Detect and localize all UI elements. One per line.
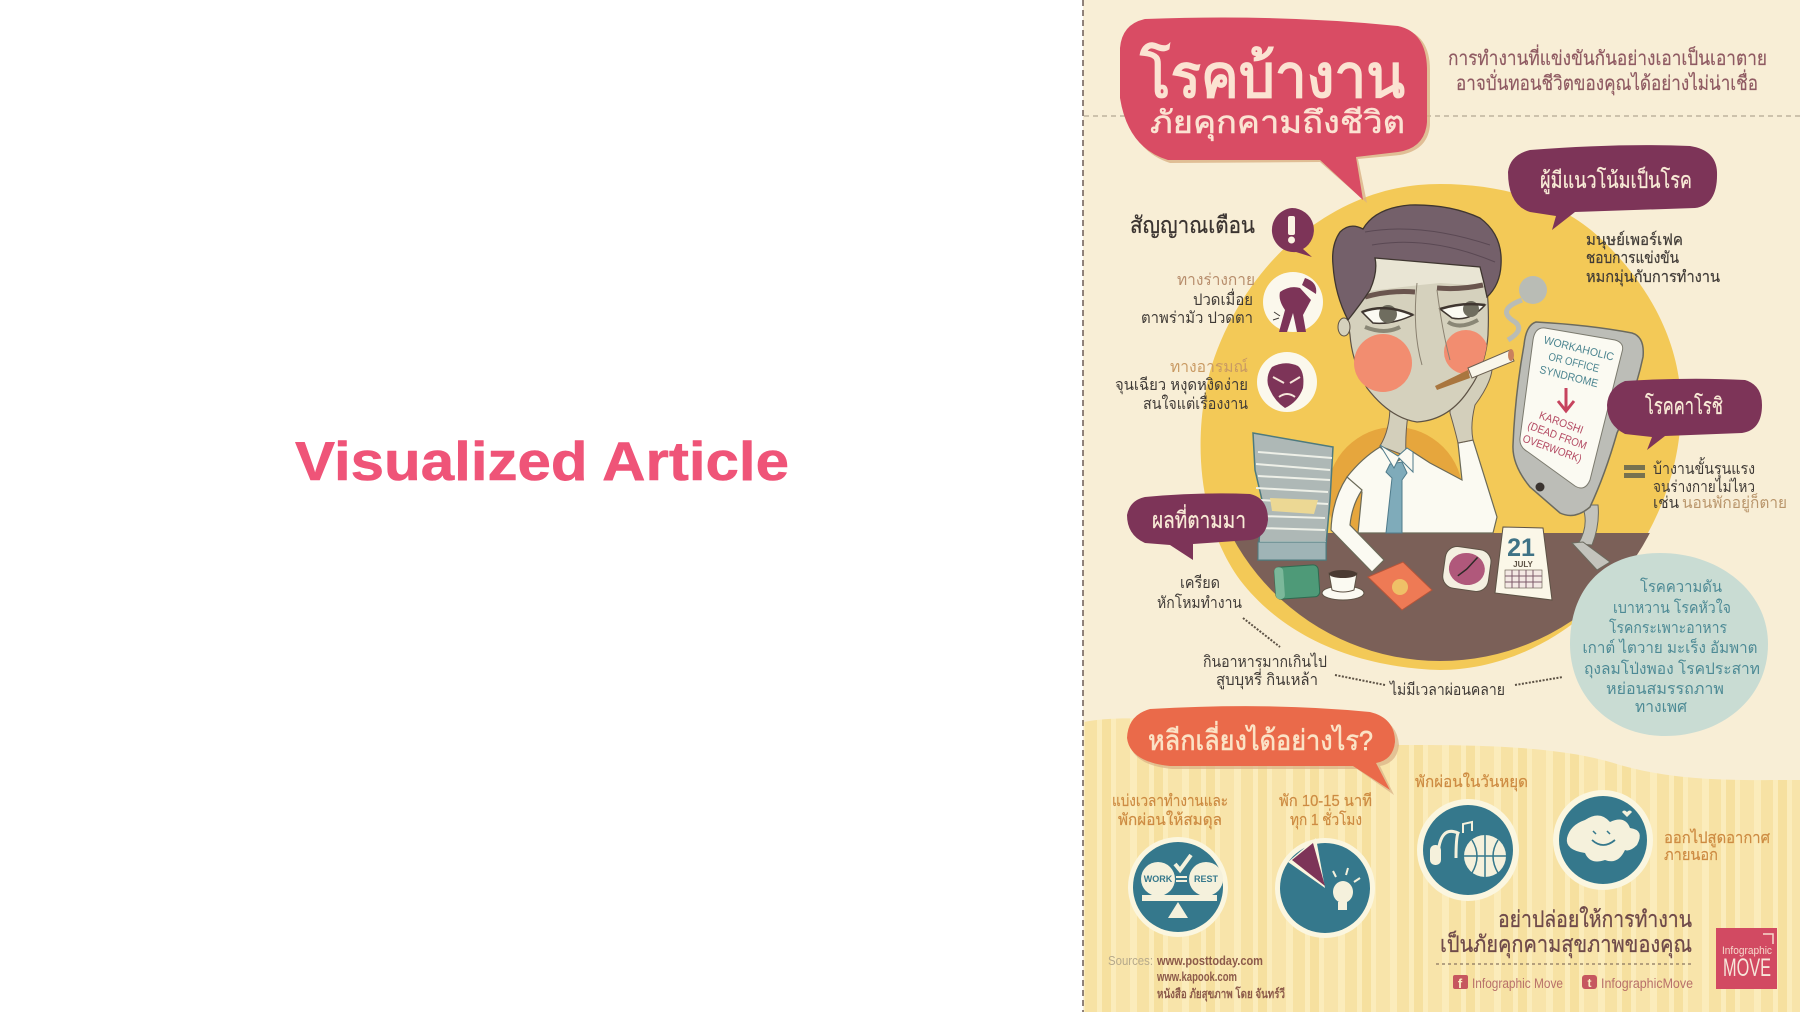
left eye: [1362, 305, 1413, 323]
yellow background shape: [1201, 184, 1681, 670]
icon: work rest balance: WORK: [1144, 874, 1173, 884]
poster left dashed edge: [1082, 0, 1084, 1012]
text: physical signs: ตาพร่ามัว ปวดตา: [1141, 310, 1253, 327]
screen text: workaholic: SYNDROME: [1538, 364, 1599, 390]
text: consequences: เครียด: [1180, 574, 1220, 592]
text: physical signs: [1141, 272, 1255, 327]
logo: Infographic Move: [1716, 928, 1777, 989]
panel: related diseases blob: ทางเพศ: [1635, 699, 1687, 716]
eyebrows: [1365, 285, 1483, 297]
social links: f: [1458, 976, 1463, 991]
closing message: อย่าปล่อยให้การทำงาน: [1498, 906, 1692, 932]
hair: [1333, 205, 1501, 320]
bubble: karoshi: [1607, 379, 1762, 450]
text: at-risk description: ชอบการแข่งขัน: [1586, 250, 1679, 267]
social links: InfographicMove: [1601, 976, 1693, 991]
sources: www.posttoday.com: [1156, 954, 1263, 968]
left arm sleeve: [1331, 477, 1384, 572]
right cheek: [1444, 330, 1488, 374]
calendar: 21: [1507, 534, 1535, 562]
tablet foot: [1572, 542, 1610, 570]
panel: related diseases blob: โรคความดัน: [1640, 577, 1722, 596]
bubble: how to avoid: [1127, 706, 1399, 795]
bubble: karoshi: โรคคาโรชิ: [1645, 393, 1723, 419]
table: [1234, 533, 1650, 661]
text: tips: พักผ่อนในวันหยุด: [1415, 772, 1528, 792]
icon: body pain: [1263, 272, 1323, 332]
smoke: [1506, 276, 1547, 340]
heading: warning signs: สัญญาณเตือน: [1130, 212, 1255, 238]
tablet screen: [1520, 328, 1623, 488]
icon: break clock: [1275, 838, 1375, 938]
footer dotted line: [1436, 963, 1693, 965]
panel: related diseases blob: [1570, 553, 1768, 736]
text: at-risk description: หมกมุ่นกับการทำงาน: [1586, 269, 1720, 287]
text: tips: พักผ่อนให้สมดุล: [1118, 810, 1222, 830]
sources: www.kapook.com: [1156, 970, 1237, 984]
text: emotional signs: สนใจแต่เรื่องงาน: [1143, 392, 1248, 413]
bubble: at-risk group: [1508, 145, 1717, 230]
bubble: consequences: ผลที่ตามมา: [1152, 504, 1246, 533]
text: consequences: สูบบุหรี่ กินเหล้า: [1216, 668, 1318, 690]
screen text: workaholic: [1538, 335, 1615, 390]
hair strands: [1365, 229, 1495, 262]
text: emotional signs: จุนเฉียว หงุดหงิดง่าย: [1115, 376, 1248, 395]
text: physical signs: ทางร่างกาย: [1177, 272, 1255, 289]
eye bags: [1365, 320, 1478, 331]
intro text: [1448, 44, 1767, 96]
panel: related diseases blob: ถุงลมโป่งพอง โรคประสาท: [1584, 659, 1760, 679]
heading: Visualized Article: Visualized Article: [295, 430, 789, 492]
panel: infographic poster: [1083, 0, 1800, 1012]
social links: t: [1588, 976, 1592, 990]
screen text: workaholic: WORKAHOLIC: [1542, 335, 1615, 364]
logo: Infographic Move: MOVE: [1723, 954, 1771, 982]
forehead: [1370, 258, 1484, 291]
panel: related diseases blob: เบาหวาน โรคหัวใจ: [1613, 598, 1731, 617]
logo: Infographic Move: Infographic: [1722, 945, 1772, 957]
text: consequences: [1157, 574, 1505, 699]
bubble: at-risk group: ผู้มีแนวโน้มเป็นโรค: [1540, 165, 1692, 194]
text: at-risk description: มนุษย์เพอร์เฟค: [1586, 230, 1683, 250]
text: karoshi description: [1653, 457, 1787, 513]
tablet body: [1513, 322, 1643, 515]
calendar: [1495, 527, 1552, 600]
paper stack: [1253, 433, 1333, 560]
coffee cup: [1322, 570, 1364, 600]
icon: equals sign: [1624, 465, 1645, 478]
text: tips: ภายนอก: [1664, 847, 1718, 864]
tablet stand: [1578, 505, 1598, 545]
text: tips: พัก 10-15 นาที: [1279, 792, 1372, 810]
tablet logo: [1536, 482, 1544, 492]
text: consequences: หักโหมทำงาน: [1157, 593, 1242, 612]
collar: [1380, 445, 1413, 472]
cigarette: [1435, 349, 1514, 390]
sources: หนังสือ ภัยสุขภาพ โดย จันทร์วี: [1157, 986, 1285, 1002]
icon: work rest balance: REST: [1194, 874, 1218, 884]
screen text: karoshi: OVERWORK): [1521, 433, 1583, 465]
screen text: workaholic: OR OFFICE: [1547, 351, 1600, 375]
bubble: consequences: [1127, 493, 1268, 560]
social links: [1453, 975, 1693, 991]
calendar: JULY: [1513, 560, 1534, 569]
text: consequences: ไม่มีเวลาผ่อนคลาย: [1388, 680, 1505, 699]
text: karoshi description: บ้างานขั้นรุนแรง: [1653, 457, 1755, 479]
face: [1347, 257, 1488, 422]
title text line 2: ภัยคุกคามถึงชีวิต: [1150, 105, 1405, 142]
text: tips: แบ่งเวลาทำงานและ: [1112, 793, 1228, 810]
bubble: how to avoid: หลีกเลี่ยงได้อย่างไร?: [1148, 721, 1373, 756]
screen text: karoshi: KAROSHI: [1537, 410, 1585, 437]
illustration: tablet with message: [1513, 322, 1643, 570]
left cheek: [1354, 334, 1412, 392]
text: consequences: กินอาหารมากเกินไป: [1203, 652, 1327, 671]
screen arrow: [1558, 388, 1574, 411]
text: physical signs: ปวดเมื่อย: [1193, 288, 1253, 309]
orange circle behind man: [1327, 427, 1463, 563]
alarm clock: [1441, 545, 1493, 593]
panel: related diseases blob: เกาต์ ไตวาย มะเร็ง อัมพาต: [1582, 637, 1758, 657]
hand: [1450, 370, 1492, 443]
illustration: desk items: [1253, 433, 1552, 610]
text: karoshi description: นอนพักอยู่ก็ตาย: [1682, 492, 1787, 513]
icon: work rest balance: [1128, 837, 1228, 937]
closing message: เป็นภัยคุกคามสุขภาพของคุณ: [1440, 929, 1692, 958]
screen text: karoshi: [1521, 410, 1588, 465]
striped footer band: [1084, 718, 1800, 1012]
closing message: [1440, 906, 1692, 958]
title bubble: [1120, 18, 1430, 203]
panel: related diseases blob: หย่อนสมรรถภาพ: [1606, 681, 1724, 698]
illustration: office worker: [1331, 205, 1547, 572]
panel: related diseases blob: โรคกระเพาะอาหาร: [1609, 618, 1727, 637]
icon: music and basketball: [1417, 799, 1519, 901]
neck: [1380, 405, 1408, 456]
tie: [1386, 462, 1407, 533]
poster background: [1083, 0, 1800, 1012]
sources: Sources:: [1108, 954, 1153, 968]
text: tips: ออกไปสูดอากาศ: [1664, 828, 1770, 848]
text: karoshi description: เช่น: [1653, 495, 1679, 512]
shirt torso and sleeve: [1347, 440, 1497, 533]
icon: angry face: [1257, 352, 1317, 412]
text: emotional signs: ทางอารมณ์: [1170, 357, 1248, 376]
sources: [1108, 954, 1285, 1002]
text: karoshi description: จนร่างกายไม่ไหว: [1653, 477, 1755, 496]
nose and mouth lines: [1415, 283, 1450, 365]
dotted connectors: [1243, 618, 1563, 685]
icon: happy cloud: [1553, 790, 1653, 890]
title text line 1: โรคบ้างาน: [1140, 42, 1405, 110]
text: emotional signs: [1115, 357, 1248, 413]
screen text: karoshi: (DEAD FROM: [1526, 420, 1588, 452]
header dashed line: [1084, 115, 1800, 117]
icon: warning bubble: [1272, 208, 1314, 257]
intro text: อาจบั่นทอนชีวิตของคุณได้อย่างไม่น่าเชื่อ: [1456, 69, 1758, 96]
ear: [1338, 318, 1350, 336]
text: tips: [1112, 772, 1770, 864]
text: at-risk description: [1586, 230, 1720, 287]
social links: Infographic Move: [1472, 976, 1563, 991]
right eye: [1440, 301, 1485, 319]
can: [1274, 565, 1320, 599]
chips bag: [1368, 562, 1432, 610]
text: tips: ทุก 1 ชั่วโมง: [1290, 808, 1362, 830]
